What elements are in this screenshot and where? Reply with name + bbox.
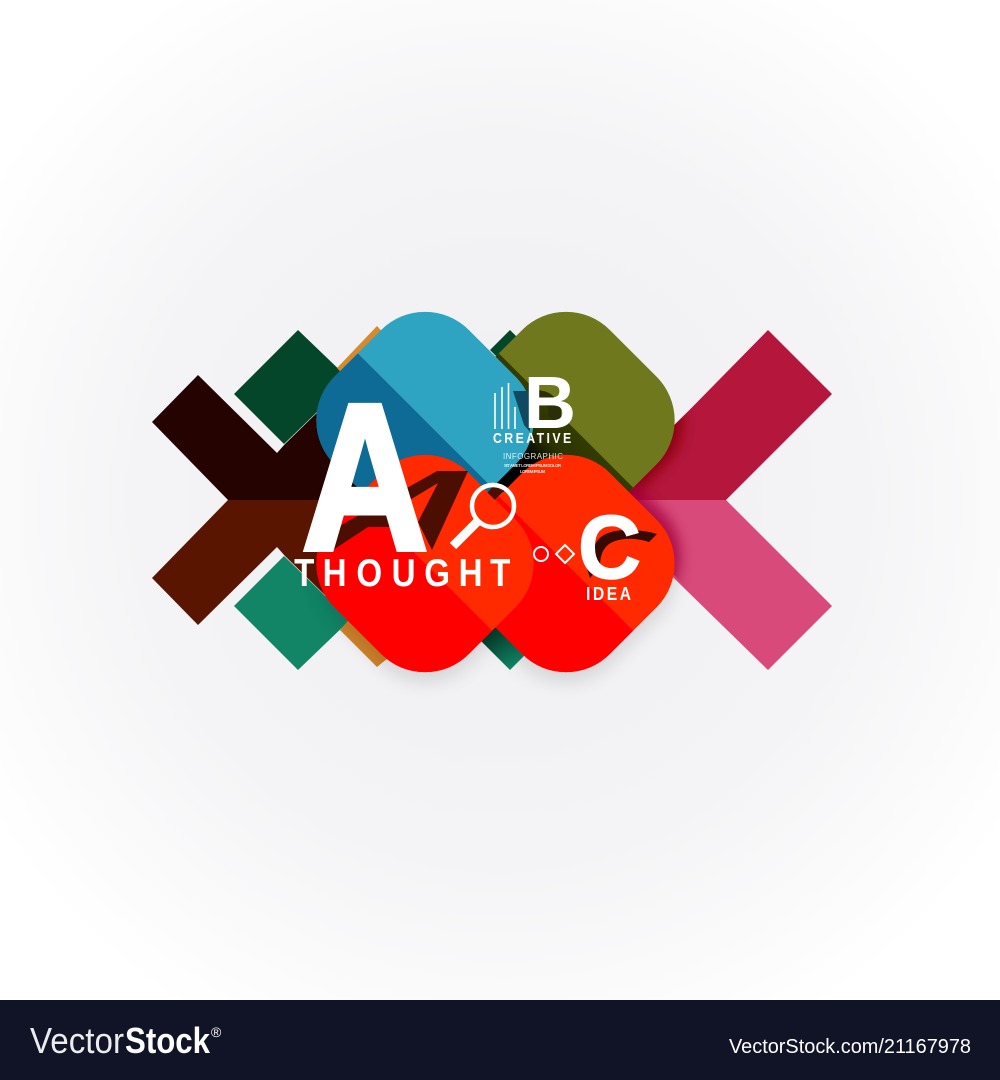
soft panel shadow — [291, 438, 700, 706]
footer bar — [0, 1000, 1000, 1080]
green diamonds — [234, 330, 530, 670]
icon: magnifying glass — [453, 485, 514, 546]
label: CREATIVE: CREATIVE — [493, 430, 571, 446]
right cross arms — [600, 330, 832, 670]
orange diamond strips — [337, 326, 392, 667]
footer url: VectorStock.com/21167978 — [729, 1036, 971, 1058]
panel: olive rounded square — [432, 286, 700, 555]
letter A: A — [302, 362, 428, 594]
label: IDEA: IDEA — [586, 583, 631, 604]
footer logo: Stock — [125, 1020, 211, 1061]
left cross arms — [152, 375, 400, 625]
label: INFOGRAPHIC: INFOGRAPHIC — [503, 452, 563, 461]
footer logo — [30, 1020, 222, 1061]
footer logo: ® — [211, 1024, 222, 1040]
footer logo: Vector — [30, 1020, 124, 1061]
shadow behind letter C — [585, 530, 657, 578]
dark shadow shape behind letter A — [333, 471, 468, 550]
icon: small circle — [534, 547, 548, 561]
fine print: SIT AMET LOREM IPSUM DOLOR — [504, 463, 561, 468]
shadow behind letter B — [513, 390, 561, 432]
dark fold tip — [488, 484, 503, 500]
shadow on right arms — [629, 408, 690, 582]
icon: small diamond — [556, 545, 574, 563]
fine print: LOREM IPSUM — [520, 469, 546, 474]
label: THOUGHT: THOUGHT — [294, 550, 510, 595]
icon: bar lines — [495, 383, 515, 429]
fine print — [504, 463, 561, 474]
letter C: C — [578, 498, 641, 598]
panel: blue rounded square — [291, 286, 559, 555]
panel: right red rounded square — [432, 429, 700, 698]
letter B: B — [524, 361, 576, 444]
panel: left red rounded square — [291, 429, 559, 698]
